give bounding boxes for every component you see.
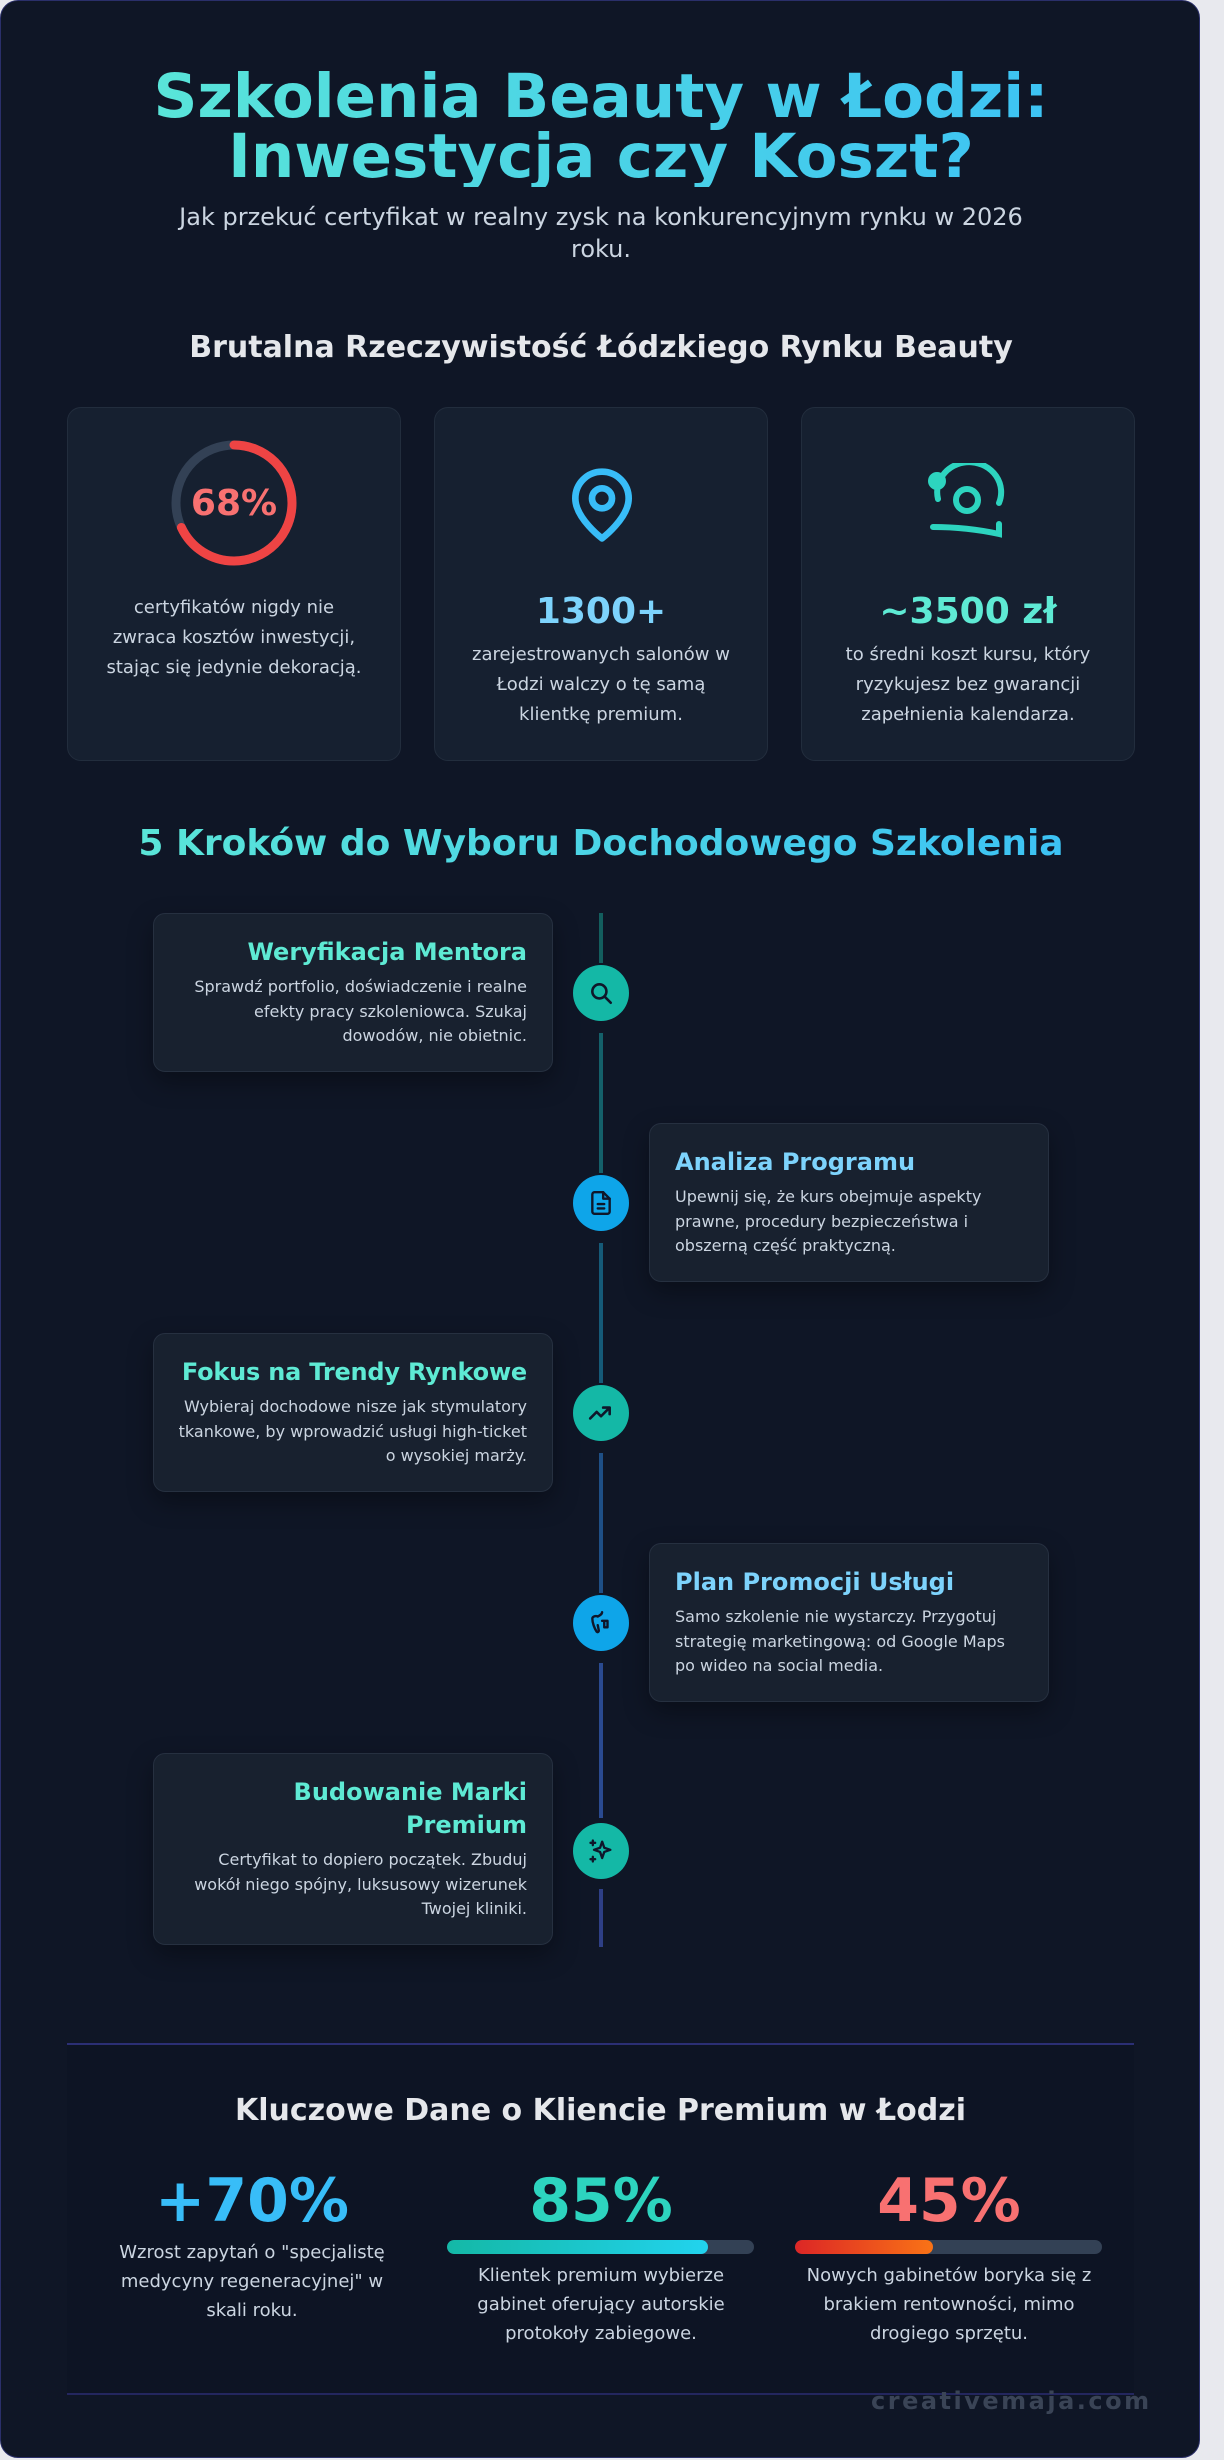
text: stając się jedynie dekoracją. bbox=[106, 657, 362, 678]
stat: 45% bbox=[795, 2166, 1102, 2344]
step 4: Samo szkolenie nie wystarczy. Przygotuj strategię marketingową: od Google Maps po wideo na social media. bbox=[675, 1607, 1005, 1675]
heading: Kluczowe Dane o Kliencie Premium w Łodzi bbox=[235, 2093, 966, 2128]
stat: +70%: Wzrost zapytań o "specjalistę medycyny regeneracyjnej" w skali roku. bbox=[119, 2242, 385, 2321]
ring chart bbox=[172, 440, 296, 566]
section heading: 5 steps: 5 Kroków do Wyboru Dochodowego Szkolenia bbox=[138, 823, 1064, 864]
stat: 85% bbox=[447, 2166, 754, 2344]
icon: trending up bbox=[573, 1385, 629, 1441]
section heading: 5 steps bbox=[1, 821, 1201, 867]
title: Szkolenia Beauty w Łodzi: bbox=[153, 61, 1049, 132]
stat: 85%: 85% bbox=[529, 2166, 673, 2236]
text bbox=[846, 644, 1090, 725]
bar 85 bbox=[447, 2240, 754, 2254]
step 5: Budowanie Marki bbox=[294, 1778, 527, 1806]
text: Łodzi walczy o tę samą bbox=[497, 674, 705, 695]
step 3: Wybieraj dochodowe nisze jak stymulatory tkankowe, by wprowadzić usługi high‑ticket o wysokiej marży. bbox=[179, 1397, 527, 1465]
text: ryzykujesz bez gwarancji bbox=[856, 674, 1080, 695]
stat card: 1300+ bbox=[434, 407, 768, 761]
step 4: Plan Promocji Usługi bbox=[675, 1568, 954, 1596]
ring chart: 68% bbox=[191, 483, 277, 524]
step 5: Certyfikat to dopiero początek. Zbuduj wokół niego spójny, luksusowy wizerunek Twojej kliniki. bbox=[194, 1850, 527, 1918]
step 2: Analiza Programu bbox=[675, 1148, 915, 1176]
step 1: Sprawdź portfolio, doświadczenie i realne efekty pracy szkoleniowca. Szukaj dowodów, nie obietnic. bbox=[194, 977, 527, 1045]
text: klientkę premium. bbox=[519, 704, 683, 725]
step 1: Weryfikacja Mentora bbox=[247, 938, 527, 966]
text: to średni koszt kursu, który bbox=[846, 644, 1090, 665]
icon: document bbox=[573, 1175, 629, 1231]
icon: sparkles bbox=[573, 1823, 629, 1879]
number: 1300+ bbox=[536, 591, 666, 632]
icon: search bbox=[573, 965, 629, 1021]
step 3: Fokus na Trendy Rynkowe bbox=[182, 1358, 527, 1386]
panel: premium client data bbox=[67, 2043, 1134, 2395]
section heading: reality: Brutalna Rzeczywistość Łódzkiego Rynku Beauty bbox=[189, 330, 1013, 365]
step 2 bbox=[649, 1123, 1049, 1282]
stat card: 68% bbox=[67, 407, 401, 761]
stat: +70%: +70% bbox=[155, 2166, 349, 2236]
text bbox=[472, 644, 730, 725]
step 4 bbox=[649, 1543, 1049, 1702]
number: ~3500 zł bbox=[879, 591, 1057, 632]
step 2: Upewnij się, że kurs obejmuje aspekty prawne, procedury bezpieczeństwa i obszerną część praktyczną. bbox=[675, 1187, 981, 1255]
step 3 bbox=[153, 1333, 553, 1492]
stat: 85%: Klientek premium wybierze gabinet oferujący autorskie protokoły zabiegowe. bbox=[477, 2265, 725, 2344]
text: zarejestrowanych salonów w bbox=[472, 644, 730, 665]
stat: 45%: Nowych gabinetów boryka się z brakiem rentowności, mimo drogiego sprzętu. bbox=[807, 2265, 1091, 2344]
stat: +70% bbox=[119, 2166, 385, 2321]
step 5 bbox=[153, 1753, 553, 1944]
icon: coin bbox=[928, 463, 1004, 538]
title: Inwestycja czy Koszt? bbox=[228, 121, 974, 192]
watermark: creativemaja.com bbox=[871, 2387, 1152, 2415]
icon: map pin bbox=[572, 468, 632, 542]
stat card: 3500 zl bbox=[801, 407, 1135, 761]
text: zapełnienia kalendarza. bbox=[861, 704, 1075, 725]
stat: 45%: 45% bbox=[877, 2166, 1021, 2236]
title bbox=[1, 67, 1201, 187]
timeline line bbox=[599, 913, 603, 1947]
subtitle: Jak przekuć certyfikat w realny zysk na konkurencyjnym rynku w 2026 roku. bbox=[179, 203, 1023, 263]
step 1 bbox=[153, 913, 553, 1072]
text bbox=[106, 597, 362, 678]
icon: megaphone bbox=[573, 1595, 629, 1651]
step 5: Premium bbox=[406, 1811, 527, 1839]
bar 45 bbox=[795, 2240, 1102, 2254]
text: certyfikatów nigdy nie bbox=[134, 597, 334, 618]
text: zwraca kosztów inwestycji, bbox=[113, 627, 355, 648]
